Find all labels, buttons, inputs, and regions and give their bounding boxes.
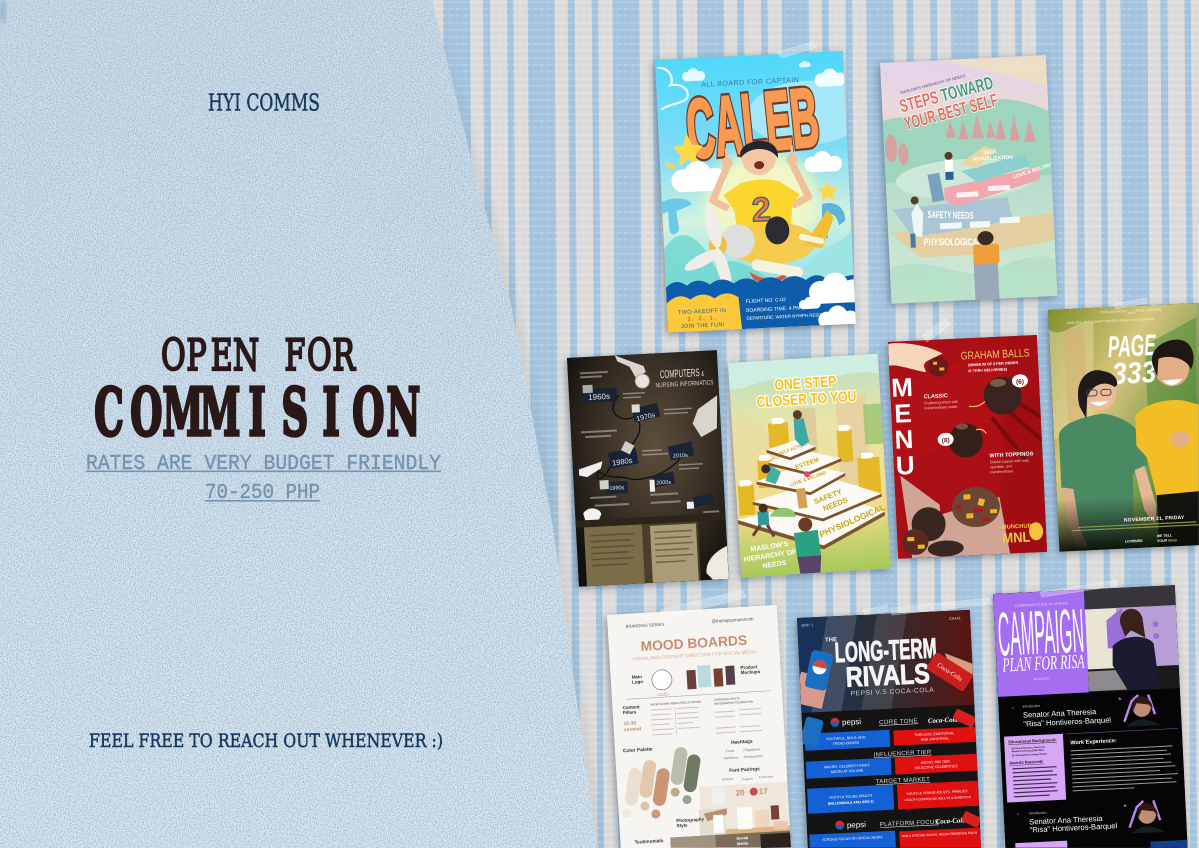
item: with toppings ball: sprinkles, and — [990, 464, 1012, 469]
section: core tone: Coca-Cola — [928, 717, 959, 725]
text: film billing — [1066, 308, 1162, 325]
icon: Pepsi can — [791, 647, 834, 709]
poster: Long-term rivals: GRP. 1 — [801, 623, 813, 628]
band: flight details: FLIGHT NO: C-02 — [746, 297, 786, 305]
section: background and work experience: Manila University (1986-1987) — [1012, 749, 1044, 753]
band: credits and logos: NOVEMBER 21, FRIDAY — [1124, 515, 1185, 524]
section: hashtags: #WellnessPH — [744, 754, 764, 759]
band: flight details: JOIN THE FUN! — [681, 322, 725, 330]
section: product photography: Testimonials — [634, 838, 664, 846]
block: campaign title: PLAN FOR RISA — [1001, 651, 1085, 677]
text: Menu vertical — [892, 378, 914, 475]
pyramid: hierarchy steps: SAFETY — [812, 487, 843, 506]
section: second introduction: "Risa" Hontiveros-Barquel — [1029, 821, 1118, 834]
poster: Mood boards branding: @thehappymammoth — [711, 616, 754, 624]
title: The long-term rivals — [825, 632, 939, 699]
figure: woman in green — [1056, 368, 1158, 551]
section: font pairings — [721, 765, 773, 782]
title: Steps toward your best self — [899, 74, 998, 130]
text: Maslow's hierarchy of needs — [744, 541, 796, 568]
section: influencer tier: MICRO, MID TIER, — [921, 759, 951, 765]
panel shadow — [432, 0, 601, 848]
section: platform focus: PLATFORM FOCUS — [880, 820, 939, 828]
poster: Mood boards branding — [607, 605, 791, 848]
text: price range: 70-250 PHP — [205, 482, 320, 505]
title: The long-term rivals: THE — [825, 637, 837, 644]
poster: Computers and nursing informatics — [567, 350, 729, 587]
section: target market: YOUTH & YOUNG ADULTS, FAMILIES, — [906, 789, 969, 796]
panels: side tabs — [734, 417, 882, 516]
title: The long-term rivals: PEPSI V.S COCA-COLA — [850, 687, 934, 698]
figure: hiker with orange backpack — [972, 231, 1001, 300]
text: All board for captain: ALL BOARD FOR CAPTAIN — [701, 75, 799, 89]
pyramid: hierarchy steps: PHYSIOLOGICAL — [818, 502, 886, 539]
section: content pillars — [622, 695, 762, 739]
section: font pairings: Font Pairings — [729, 766, 760, 774]
section: target market: HEALTH-CONSCIOUS ADULTS & DIABETICS — [904, 795, 971, 802]
poster: Graham balls menu — [888, 335, 1047, 559]
section: background and work experience: Work Experience: — [1070, 738, 1117, 746]
section: content pillars: 15-30 — [623, 720, 637, 727]
timeline: decades: 1970s — [636, 412, 657, 423]
icon: Coca-Cola can with hand: Coca-Cola — [936, 662, 963, 683]
section: product photography: Social — [736, 835, 748, 841]
item: classic ball — [923, 373, 1043, 464]
section: product photography: 17 — [758, 787, 768, 796]
header: branding series: BRANDING SERIES — [626, 622, 665, 629]
text: Maslow's hierarchy of needs: HIERARCHY OF — [743, 549, 798, 564]
section: introduction Senator Ana Theresia — [1010, 694, 1160, 732]
poster: Caleb birthday invitation — [655, 50, 878, 336]
section: content pillars: second — [624, 726, 642, 733]
panel: left denim text panel — [0, 0, 600, 848]
section: content pillars: Content — [622, 704, 640, 710]
pyramid: hierarchy of needs steps: SELF- — [983, 149, 998, 156]
title: The long-term rivals: RIVALS — [845, 658, 930, 693]
band: credits and logos — [1057, 493, 1199, 552]
row: logo and product mockups: Logo — [632, 679, 643, 685]
title: Graham balls: GRAHAM BALLS — [960, 347, 1030, 363]
title: Open for: OPEN FOR — [161, 331, 356, 380]
section: hashtags: #Yuan — [725, 749, 735, 753]
logo: Munchubi MNL — [1002, 522, 1044, 543]
section: hashtags — [723, 738, 764, 760]
section: background and work experience: Awards Received: — [1009, 759, 1044, 765]
poster: Caleb birthday invitation: CALEB — [682, 70, 823, 176]
pyramid: hierarchy of needs steps: LOVE & BELONG — [1012, 162, 1054, 181]
item: with toppings ball: (8) — [942, 437, 950, 445]
section: introduction Senator Ana Theresia: ↘ — [1010, 705, 1014, 710]
section: second introduction: Introduction — [1029, 811, 1047, 816]
section: platform focus — [808, 810, 983, 848]
item: classic ball: CLASSIC — [924, 393, 948, 400]
row: logo and product mockups: LOGO — [657, 691, 669, 697]
heading: HYI Comms: HYI COMMS — [208, 90, 320, 116]
band: flight details — [666, 272, 856, 332]
block: campaign title — [993, 590, 1089, 697]
section: platform focus: Coca-Cola — [936, 817, 966, 826]
item: with toppings ball — [938, 424, 1034, 474]
item: classic ball: marshmallows inside — [924, 405, 958, 410]
pyramid: hierarchy of needs steps: ACTUALIZATION — [973, 155, 1013, 163]
title: One step closer to you: ONE STEP — [774, 373, 837, 394]
logo: Munchubi MNL: MUNCHUBI — [1002, 523, 1034, 531]
item: classic ball: (6) — [1016, 379, 1024, 386]
section: second introduction — [1013, 799, 1188, 848]
section: introduction Senator Ana Theresia: * — [1118, 696, 1122, 705]
icon: collage hands — [573, 350, 729, 586]
pyramid: hierarchy steps: SELF ACTUAL — [778, 441, 809, 456]
text: Maslow's hierarchy of needs: NEEDS — [762, 560, 787, 570]
poster: Long-term rivals — [787, 610, 983, 848]
title: The long-term rivals: LONG-TERM — [834, 632, 937, 668]
section: content pillars: INFOGRAPHIC FOUNDATION — [714, 700, 753, 706]
logo: Munchubi MNL: MNL — [1002, 529, 1031, 546]
illustration: boy in airplane — [684, 140, 834, 282]
row: logo and product mockups: Main — [632, 674, 642, 680]
section: core tone: pepsi — [842, 717, 862, 727]
section: font pairings: Brandon — [722, 777, 734, 781]
text: Menu vertical: N — [894, 424, 914, 455]
section: core tone: CORE TONE — [879, 718, 918, 726]
title: Computers & Nursing Informatics: COMPUTERS & — [660, 367, 704, 381]
pyramid: hierarchy of needs steps: PHYSIOLOGICAL — [924, 237, 982, 248]
pyramid: hierarchy of needs steps: SAFETY NEEDS — [927, 210, 974, 222]
section: content pillars: CAROUSEL POSTS — [714, 696, 740, 702]
item: with toppings ball: marshmallows — [990, 469, 1013, 474]
text: Maslow's hierarchy of needs: MASLOW'S — [750, 541, 789, 554]
section: target market: (MILLENNIALS AND GEN Z) — [828, 800, 874, 806]
section: hashtags: #Wellness — [724, 755, 739, 760]
text: rates are budget friendly: RATES ARE VERY BUDGET FRIENDLY — [86, 453, 441, 476]
band: flight details: DEPARTURE: WATER NYMPH RESORT — [746, 312, 828, 321]
timeline: decades — [578, 365, 719, 519]
poster: Long-term rivals: CA141 — [949, 616, 961, 621]
section: introduction Senator Ana Theresia: Introduction — [1022, 704, 1040, 709]
title: Page 333: PAGE — [1107, 329, 1157, 364]
title: Steps toward your best self: YOUR BEST SELF — [902, 90, 1000, 134]
title: Steps toward your best self: MASLOW'S HIERARCHY OF NEEDS — [900, 73, 966, 95]
timeline: decades: 1980s — [612, 456, 633, 468]
text: Menu vertical: E — [894, 398, 912, 429]
section: background and work experience: St. Scholastica's College Manila — [1012, 753, 1048, 757]
row: logo and product mockups: Product — [740, 664, 758, 670]
section: target market: YOUTH & YOUNG ADULTS — [829, 794, 873, 800]
poster: One step closer to you — [727, 354, 891, 578]
row: logo and product mockups: Mockups — [741, 669, 761, 675]
section: introduction Senator Ana Theresia: Senator Ana Theresia — [1023, 707, 1097, 720]
text: Menu vertical: M — [890, 372, 914, 403]
section: hashtags: #Tagalpiraw — [743, 747, 761, 752]
section: target market — [807, 775, 979, 814]
panel: vintage notes — [576, 513, 729, 587]
timeline: decades: 1960s — [588, 392, 610, 402]
section: font pairings: Cormorant — [759, 774, 773, 779]
section: core tone — [798, 708, 978, 751]
band: credits and logos: WE TELL — [1157, 533, 1173, 538]
poster: Graham balls menu: (MINIMUM OF 6 PER ORDER — [968, 361, 1019, 367]
section: second introduction: ↘ — [1016, 811, 1019, 816]
box: kraft tray with balls — [899, 471, 1010, 559]
text: film billing: JOHN ANTHONY — [1099, 309, 1128, 315]
text: feel free to reach out: FEEL FREE TO REACH OUT WHENEVER :) — [89, 730, 443, 752]
text: film billing: AND — [1127, 311, 1135, 315]
pyramid: hierarchy steps: NEEDS — [822, 495, 849, 513]
band: credits and logos: LOVEBIRD — [1125, 539, 1143, 544]
pyramid: hierarchy steps — [738, 440, 886, 550]
item: with toppings ball: WITH TOPPINGS — [989, 451, 1034, 459]
title: Page 333 — [1108, 334, 1156, 384]
pyramid: hierarchy steps: ESTEEM — [795, 457, 820, 471]
text: Menu vertical: U — [895, 450, 915, 481]
poster: Caleb birthday invitation: CALEB — [682, 70, 823, 176]
band: flight details: TWO-AKEOFF IN — [678, 308, 726, 316]
section: product photography: Photography — [676, 817, 705, 823]
figure: doctor climbing — [910, 196, 924, 248]
section: platform focus: HAS A STRONG SOCIAL MEDIA PRESENCE SUCH — [902, 831, 978, 838]
section: influencer tier — [805, 748, 977, 779]
text: film billing: HOW ONE FRIENDSHIP TURNED A PAGE IN HIS FOREVER — [1066, 317, 1156, 325]
section: influencer tier: SELECTIVE CELEBRITIES — [915, 764, 958, 770]
section: background and work experience: BS Social Sciences, Ateneo de — [1012, 746, 1046, 750]
section: core tone: TREND-DRIVEN — [833, 741, 860, 746]
title: Page 333: 333 — [1111, 356, 1157, 391]
timeline: decades: 1990s — [609, 485, 625, 492]
section: core tone: TIMELESS, EMOTIONAL, — [914, 731, 955, 737]
section: content pillars: SHORT-FORM VIDEO (REELS/TIKTOK) — [650, 700, 701, 707]
section: influencer tier: INFLUENCER TIER — [873, 750, 932, 759]
section: content pillars: Pillars — [623, 709, 637, 715]
item: with toppings ball: Classic topped with nuts, — [990, 458, 1030, 464]
block: campaign title: 08.30.2025 — [1034, 676, 1049, 681]
figure: runner on stairs — [944, 152, 954, 180]
title: One step closer to you — [756, 375, 857, 408]
poster: Page 333 movie — [1048, 303, 1199, 552]
section: introduction Senator Ana Theresia: "Risa" Hontiveros-Barquel — [1023, 715, 1112, 729]
section: platform focus: STRONG FOCUS ON SOCIAL MEDIA — [822, 835, 883, 842]
illustration: boy in airplane: 2 — [751, 191, 772, 230]
section: second introduction: * — [1123, 803, 1127, 812]
figure: man in yellow — [1132, 339, 1199, 548]
text: film billing: TRISH CANTON — [1135, 308, 1162, 313]
section: influencer tier: MICRO AT VOLUME — [831, 769, 864, 774]
section: core tone: AND UNIVERSAL — [921, 736, 949, 742]
title: Steps toward your best self: STEPS TOWARD — [897, 73, 995, 116]
section: core tone: YOUTHFUL, BOLD, AND — [826, 735, 866, 741]
poster: Mood boards branding: VISUAL AND CONTENT DIRECTION FOR SOCIAL MEDIA — [632, 649, 757, 662]
section: product photography — [631, 782, 791, 848]
section: product photography: 20 — [736, 788, 745, 798]
title: One step closer to you: CLOSER TO YOU — [756, 388, 857, 411]
band: flight details: 1, 2, 1, — [687, 315, 718, 323]
section: target market: TARGET MARKET — [876, 777, 930, 785]
section: background and work experience — [1004, 728, 1181, 803]
section: font pairings: Poppins — [742, 777, 753, 781]
section: background and work experience: Educational Background: — [1008, 737, 1057, 744]
title: Commision: COMMISION — [94, 373, 420, 451]
pyramid: hierarchy steps: LOVE & BELONG — [789, 470, 827, 487]
title: Mood boards: MOOD BOARDS — [640, 633, 747, 654]
item: classic ball: Crushed graham with — [924, 400, 958, 405]
section: second introduction: Senator Ana Theresia — [1029, 814, 1103, 826]
section: influencer tier: MACRO, CELEBRITY FIRST, — [824, 763, 870, 769]
section: color palette pills: Color Palette — [623, 747, 653, 754]
section: product photography: Media — [737, 840, 749, 846]
pyramid: hierarchy of needs steps — [886, 143, 1058, 259]
tapes: translucent adhesive strips — [660, 42, 1148, 618]
poster: Campaign plan for Risa — [993, 585, 1188, 848]
block: portrait of Risa — [1084, 585, 1180, 692]
section: product photography: Style — [676, 823, 688, 828]
poster: Computers and nursing informatics: NURSING INFORMATICS — [655, 379, 714, 389]
poster: Steps toward your best self — [880, 55, 1060, 304]
band: credits and logos: YOUR Story — [1157, 538, 1177, 543]
row: logo and product mockups — [631, 662, 762, 699]
icon: Coca-Cola can with hand — [925, 650, 974, 694]
band: flight details: BOARDING TIME: 4 PM — [746, 305, 801, 314]
timeline: decades: 2010s — [673, 453, 688, 460]
figure: running children — [752, 410, 822, 574]
timeline: decades: 2000s — [656, 480, 672, 487]
section: platform focus: pepsi — [847, 820, 866, 830]
section: hashtags: Hashtags — [731, 739, 753, 746]
section: color palette pills — [618, 744, 705, 820]
poster: Graham balls menu: IF THRU DELIVERIES) — [968, 367, 1008, 373]
block: campaign title: COMMUNICATION PLANNING — [1015, 601, 1069, 608]
